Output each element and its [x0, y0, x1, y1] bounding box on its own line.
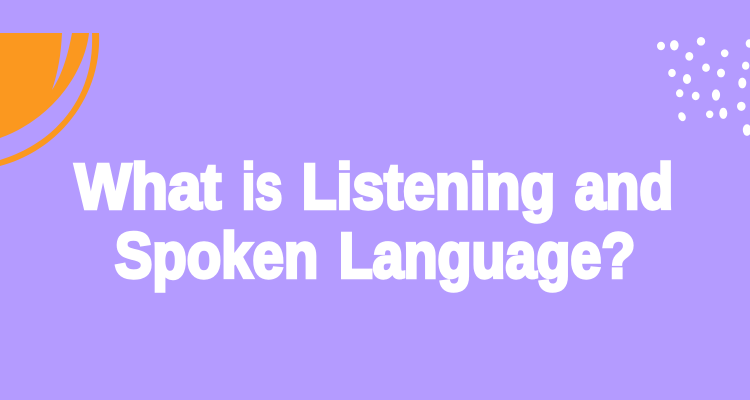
title line 2: Spoken: [115, 219, 318, 291]
title: [75, 150, 673, 291]
title line 1: [75, 150, 673, 222]
title line 2: [115, 219, 635, 291]
title line 1: What: [75, 150, 221, 222]
icon: orange sun brush shape: [0, 33, 99, 166]
title line 1: and: [575, 150, 673, 222]
title line 1: Listening: [302, 150, 555, 222]
icon: white scattered dots: [657, 37, 750, 136]
title line 1: is: [242, 150, 282, 222]
title line 2: Language?: [339, 219, 635, 291]
